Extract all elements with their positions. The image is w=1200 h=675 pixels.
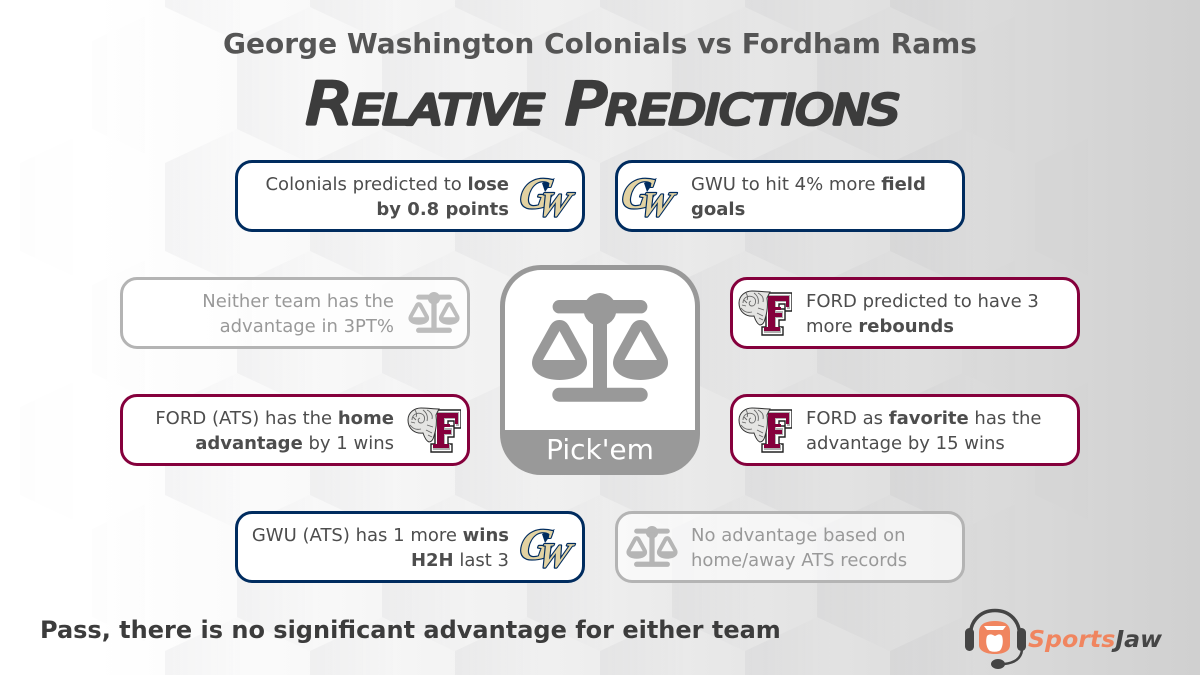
icon: large scale (532, 293, 668, 402)
card text (691, 174, 926, 220)
card: Colonials lose by 0.8 (235, 160, 585, 232)
card text: advantage by 1 wins (195, 433, 394, 454)
card: GWU wins H2H (235, 511, 585, 583)
card: no advantage home/away (615, 511, 965, 583)
card text (691, 525, 907, 571)
card: neither team 3PT (120, 277, 470, 349)
icon: GW logo: G (516, 168, 557, 218)
card text: advantage by 15 wins (806, 433, 1005, 454)
card text (155, 408, 394, 454)
card text: H2H last 3 (411, 550, 509, 571)
white icon area (505, 270, 695, 430)
card: FORD rebounds (730, 277, 1080, 349)
icon: GW logo (516, 168, 577, 224)
card text (252, 525, 509, 571)
icon: GW logo: W (534, 535, 577, 575)
icon: Fordham logo (738, 408, 792, 453)
headset (965, 610, 1026, 669)
icon: GW logo: W (534, 184, 577, 224)
card text: goals (691, 199, 745, 220)
icon: GW logo (516, 519, 577, 575)
card text: FORD as favorite has the (806, 408, 1042, 429)
card text (265, 174, 509, 220)
card text: No advantage based on (691, 525, 906, 546)
icon: GW logo: W (636, 184, 679, 224)
mouth (979, 621, 1010, 654)
icon: scale (626, 526, 678, 567)
icon: Fordham logo (738, 290, 792, 336)
card: GWU field goals (615, 160, 965, 232)
card text: advantage in 3PT% (220, 316, 394, 337)
card text: more rebounds (806, 316, 954, 337)
wordmark: SportsJaw (1028, 627, 1163, 653)
card text: Neither team has the (202, 291, 394, 312)
card: FORD home advantage (120, 394, 470, 466)
icon: Fordham logo (408, 408, 461, 453)
logo: SportsJaw (965, 608, 1163, 669)
card text (806, 408, 1042, 454)
pick'em label: Pick'em (546, 433, 654, 466)
card text: GWU (ATS) has 1 more wins (252, 525, 509, 546)
card text: FORD (ATS) has the home (155, 408, 394, 429)
card text: home/away ATS records (691, 550, 907, 571)
icon: scale (408, 292, 460, 333)
title: Relative Predictions (306, 70, 899, 138)
card text: GWU to hit 4% more field (691, 174, 926, 195)
card text: FORD predicted to have 3 (806, 291, 1039, 312)
card: FORD favorite (730, 394, 1080, 466)
icon: GW logo (618, 168, 679, 224)
icon: GW logo: G (618, 168, 659, 218)
card text (202, 291, 394, 337)
card text: Colonials predicted to lose (265, 174, 509, 195)
card text (806, 291, 1039, 337)
footer recommendation text: Pass, there is no significant advantage for either team (40, 616, 781, 644)
card text: by 0.8 points (376, 199, 509, 220)
subtitle heading: George Washington Colonials vs Fordham Rams (223, 27, 977, 60)
panel: center pick'em (500, 265, 700, 475)
icon: GW logo: G (516, 519, 557, 569)
